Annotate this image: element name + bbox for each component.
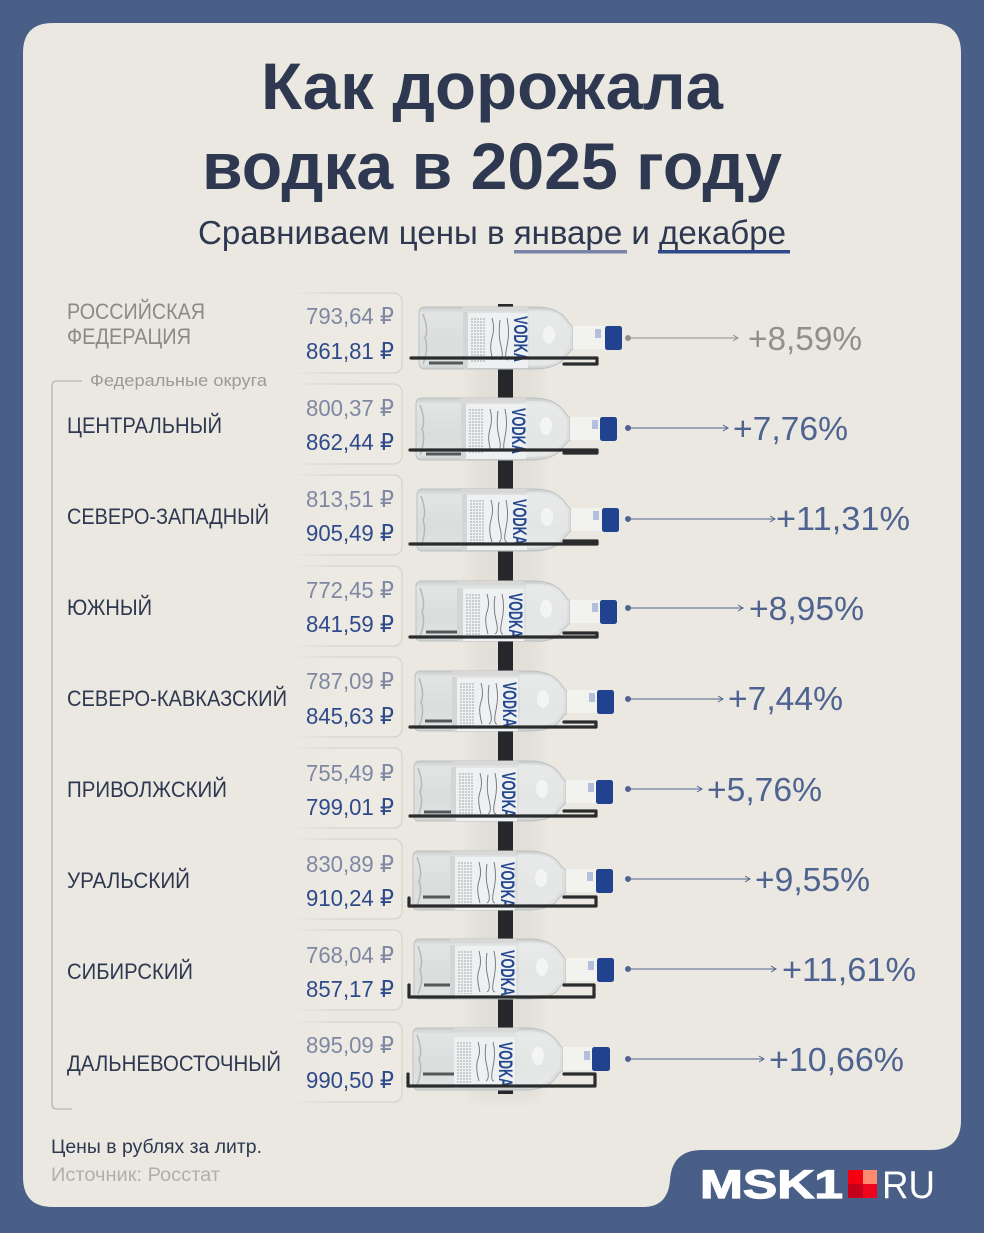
arrow (626, 335, 738, 341)
rack (408, 1074, 595, 1086)
price box (290, 657, 402, 737)
bottle (414, 761, 613, 821)
price box (290, 293, 402, 373)
label: ДАЛЬНЕВОСТОЧНЫЙ (67, 1051, 281, 1076)
row: Северо-Кавказский (67, 657, 843, 737)
rack (410, 450, 597, 453)
arrow (626, 1056, 764, 1062)
bottle: VODKA (497, 772, 518, 818)
bottle (419, 307, 622, 369)
bottle (414, 939, 614, 999)
logo: MSK1.RU: RU (882, 1164, 935, 1207)
change: +11,61% (782, 951, 916, 988)
bottle: VODKA (494, 1042, 515, 1087)
row: Сибирский (67, 930, 916, 1010)
price box (290, 839, 402, 919)
row: Уральский (67, 839, 870, 919)
bottle (416, 581, 617, 641)
price box: 895,09 ₽ (306, 1032, 394, 1058)
label: СИБИРСКИЙ (67, 959, 193, 984)
rack (409, 897, 596, 906)
price box (290, 566, 402, 646)
bottle: VODKA (507, 408, 528, 454)
footnote: source: Источник: Росстат (51, 1165, 220, 1186)
price box: 787,09 ₽ (306, 668, 394, 694)
bottle: VODKA (496, 862, 517, 908)
bottle: VODKA (504, 593, 525, 638)
arrow (626, 516, 775, 522)
rack (409, 985, 594, 997)
price box (290, 1022, 402, 1102)
rack (410, 541, 597, 544)
row: Приволжский (67, 748, 822, 828)
price box (290, 930, 402, 1010)
arrow (626, 696, 723, 702)
price box: 862,44 ₽ (306, 429, 394, 455)
change: +7,44% (728, 680, 843, 717)
price box: 857,17 ₽ (306, 976, 394, 1002)
label: УРАЛЬСКИЙ (67, 868, 190, 893)
change: +8,95% (749, 590, 864, 627)
price box: 768,04 ₽ (306, 942, 394, 968)
subtitle: Сравниваем цены в январе и декабре (198, 214, 786, 251)
change: +10,66% (769, 1041, 904, 1078)
change: +8,59% (748, 320, 862, 357)
label: СЕВЕРО-ЗАПАДНЫЙ (67, 504, 269, 529)
price box (290, 384, 402, 464)
row: Российская Федерация (67, 293, 862, 373)
price box: 755,49 ₽ (306, 760, 394, 786)
title: водка в 2025 году (202, 129, 782, 203)
row: Дальневосточный (67, 1022, 904, 1102)
price box: 813,51 ₽ (306, 486, 394, 512)
logo: MSK1.RU (700, 1163, 935, 1207)
row: Южный (67, 566, 864, 646)
rack (411, 358, 597, 364)
rack (410, 633, 597, 637)
row: Центральный (67, 384, 848, 464)
price box (290, 475, 402, 555)
change: +11,31% (776, 500, 910, 537)
price box: 800,37 ₽ (306, 395, 394, 421)
price box: 772,45 ₽ (306, 577, 394, 603)
rack (410, 811, 596, 816)
title (202, 49, 782, 203)
price box: 799,01 ₽ (306, 794, 394, 820)
price box: 910,24 ₽ (306, 885, 394, 911)
bottle (417, 489, 619, 551)
price box: 830,89 ₽ (306, 851, 394, 877)
arrow (626, 876, 750, 882)
arrow (626, 605, 743, 611)
price box: 861,81 ₽ (306, 338, 394, 364)
label: ПРИВОЛЖСКИЙ (67, 777, 227, 802)
label: ФЕДЕРАЦИЯ (67, 324, 191, 349)
price box: 841,59 ₽ (306, 611, 394, 637)
bottle: VODKA (496, 950, 517, 996)
rack (410, 722, 596, 727)
arrow (626, 966, 776, 972)
bottle (413, 851, 613, 910)
bottle: VODKA (498, 682, 519, 727)
bottle: VODKA (508, 499, 529, 545)
change: +9,55% (755, 861, 870, 898)
bracket: federal districts (52, 371, 268, 1109)
bottle (415, 671, 614, 731)
bottle: VODKA (509, 316, 530, 362)
arrow (626, 425, 728, 431)
rack post (470, 304, 540, 1100)
label: ЮЖНЫЙ (67, 595, 152, 620)
price box: 793,64 ₽ (306, 303, 394, 329)
bottle (416, 398, 617, 460)
price box: 990,50 ₽ (306, 1067, 394, 1093)
price box: 845,63 ₽ (306, 703, 394, 729)
change: +7,76% (733, 410, 848, 447)
label: СЕВЕРО-КАВКАЗСКИЙ (67, 686, 287, 711)
label: ЦЕНТРАЛЬНЫЙ (67, 413, 222, 438)
label: РОССИЙСКАЯ (67, 299, 205, 324)
row: Северо-Западный (67, 475, 910, 555)
logo: MSK1.RU: MSK1 (700, 1163, 843, 1207)
change: +5,76% (707, 771, 822, 808)
bottle (413, 1028, 610, 1090)
title: Как дорожала (261, 49, 724, 123)
price box: 905,49 ₽ (306, 520, 394, 546)
bracket: federal districts: Федеральные округа (90, 371, 268, 390)
price box (290, 748, 402, 828)
arrow (626, 786, 702, 792)
footnote: units: Цены в рублях за литр. (51, 1137, 262, 1158)
